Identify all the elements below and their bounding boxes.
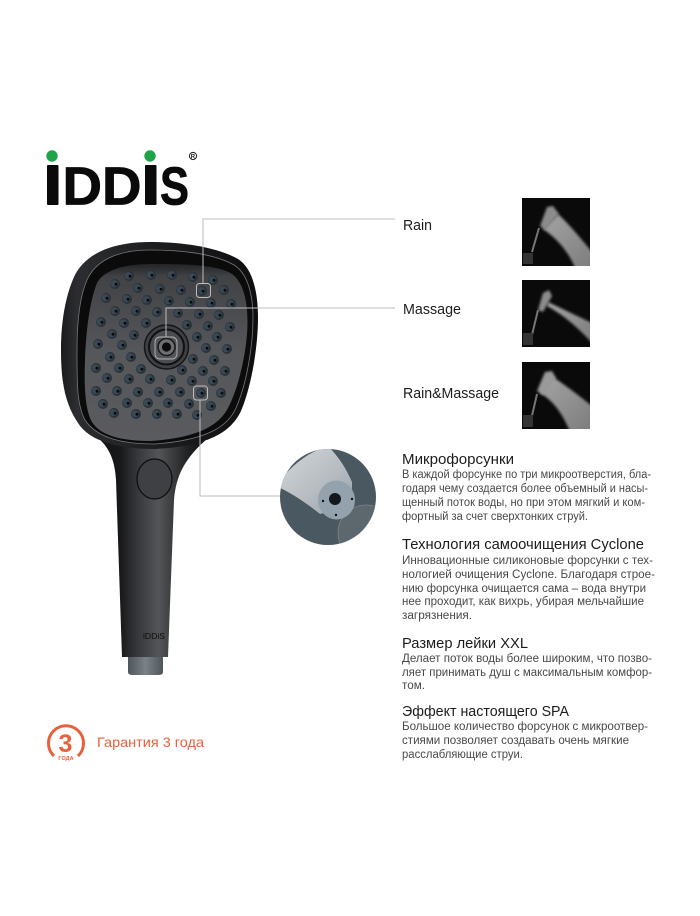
text block: Микрофорсунки: годаря чему создается более объемный и насы- [402,483,648,495]
warranty text: Гарантия 3 года [97,734,204,750]
spray face [85,264,248,441]
text block: Размер лейки XXL: Размер лейки XXL [402,635,528,652]
text block: Микрофорсунки: Микрофорсунки [402,451,514,468]
logo: IDDIS: S [160,156,189,216]
mode label: Massage: Massage [403,301,461,318]
warranty badge: ГОДА [58,756,74,762]
callout leader: Massage [166,308,395,337]
text block: Микрофорсунки: В каждой форсунке по три микроотверстия, бла- [402,469,651,481]
photo: Massage mode [522,280,592,347]
text block: Эффект настоящего SPA: Большое количество форсунок с микроотвер- [402,721,648,733]
photo: Rain&Massage mode [522,362,592,432]
nozzles [91,270,236,420]
handle logo: iDDiS [143,632,165,641]
button [137,459,172,499]
text block: Технология самоочищения Cyclone: загрязнения. [402,610,472,622]
logo: IDDIS [46,150,197,216]
mode label: Rain: Rain [403,217,432,234]
text block: Технология самоочищения Cyclone: Инновационные силиконовые форсунки с тех- [402,555,653,567]
photo: Rain mode [522,198,592,270]
text block: Эффект настоящего SPA [402,703,648,761]
text block: Эффект настоящего SPA: стиями позволяет создавать очень мягкие [402,735,629,747]
logo: IDDIS: R [191,154,196,160]
text block: Микрофорсунки: щенный поток воды, но при этом мягкий и ком- [402,497,645,509]
threaded connector [128,657,163,675]
text block: Технология самоочищения Cyclone: нологией очищения Cyclone. Благодаря строе- [402,569,655,581]
warranty badge: 3 [59,730,72,758]
text block: Технология самоочищения Cyclone: нее проходит, как вихрь, убирая мельчайшие [402,596,644,608]
text block: Технология самоочищения Cyclone: Технология самоочищения Cyclone [402,536,644,553]
text block: Размер лейки XXL: Делает поток воды более широким, что позво- [402,653,652,665]
text block: Микрофорсунки [402,451,651,523]
warranty badge [48,726,83,762]
nozzle close-up circle [280,449,376,545]
text block: Эффект настоящего SPA: Эффект настоящего SPA [402,703,569,720]
centre massage nozzle [144,325,188,369]
text block: Микрофорсунки: фортный за счет сверхтонких струй. [402,511,588,523]
text block: Размер лейки XXL [402,635,652,692]
shower head product illustration [61,242,258,675]
logo: IDDIS: DD [62,156,142,216]
mode label: Rain&Massage: Rain&Massage [403,385,499,402]
handle [98,438,208,657]
text block: Размер лейки XXL: том. [402,680,425,692]
head outer shell [61,242,258,449]
text block: Эффект настоящего SPA: расслабляющие струи. [402,749,523,761]
head rim line [77,250,253,444]
text block: Технология самоочищения Cyclone: нию форсунка очищается сама – вода внутри [402,583,646,595]
callout leader: micro nozzle [194,386,281,496]
text block: Размер лейки XXL: ляет принимать душ с максимальным комфор- [402,667,652,679]
callout leader: Rain [196,219,395,298]
text block: Технология самоочищения Cyclone [402,536,655,622]
